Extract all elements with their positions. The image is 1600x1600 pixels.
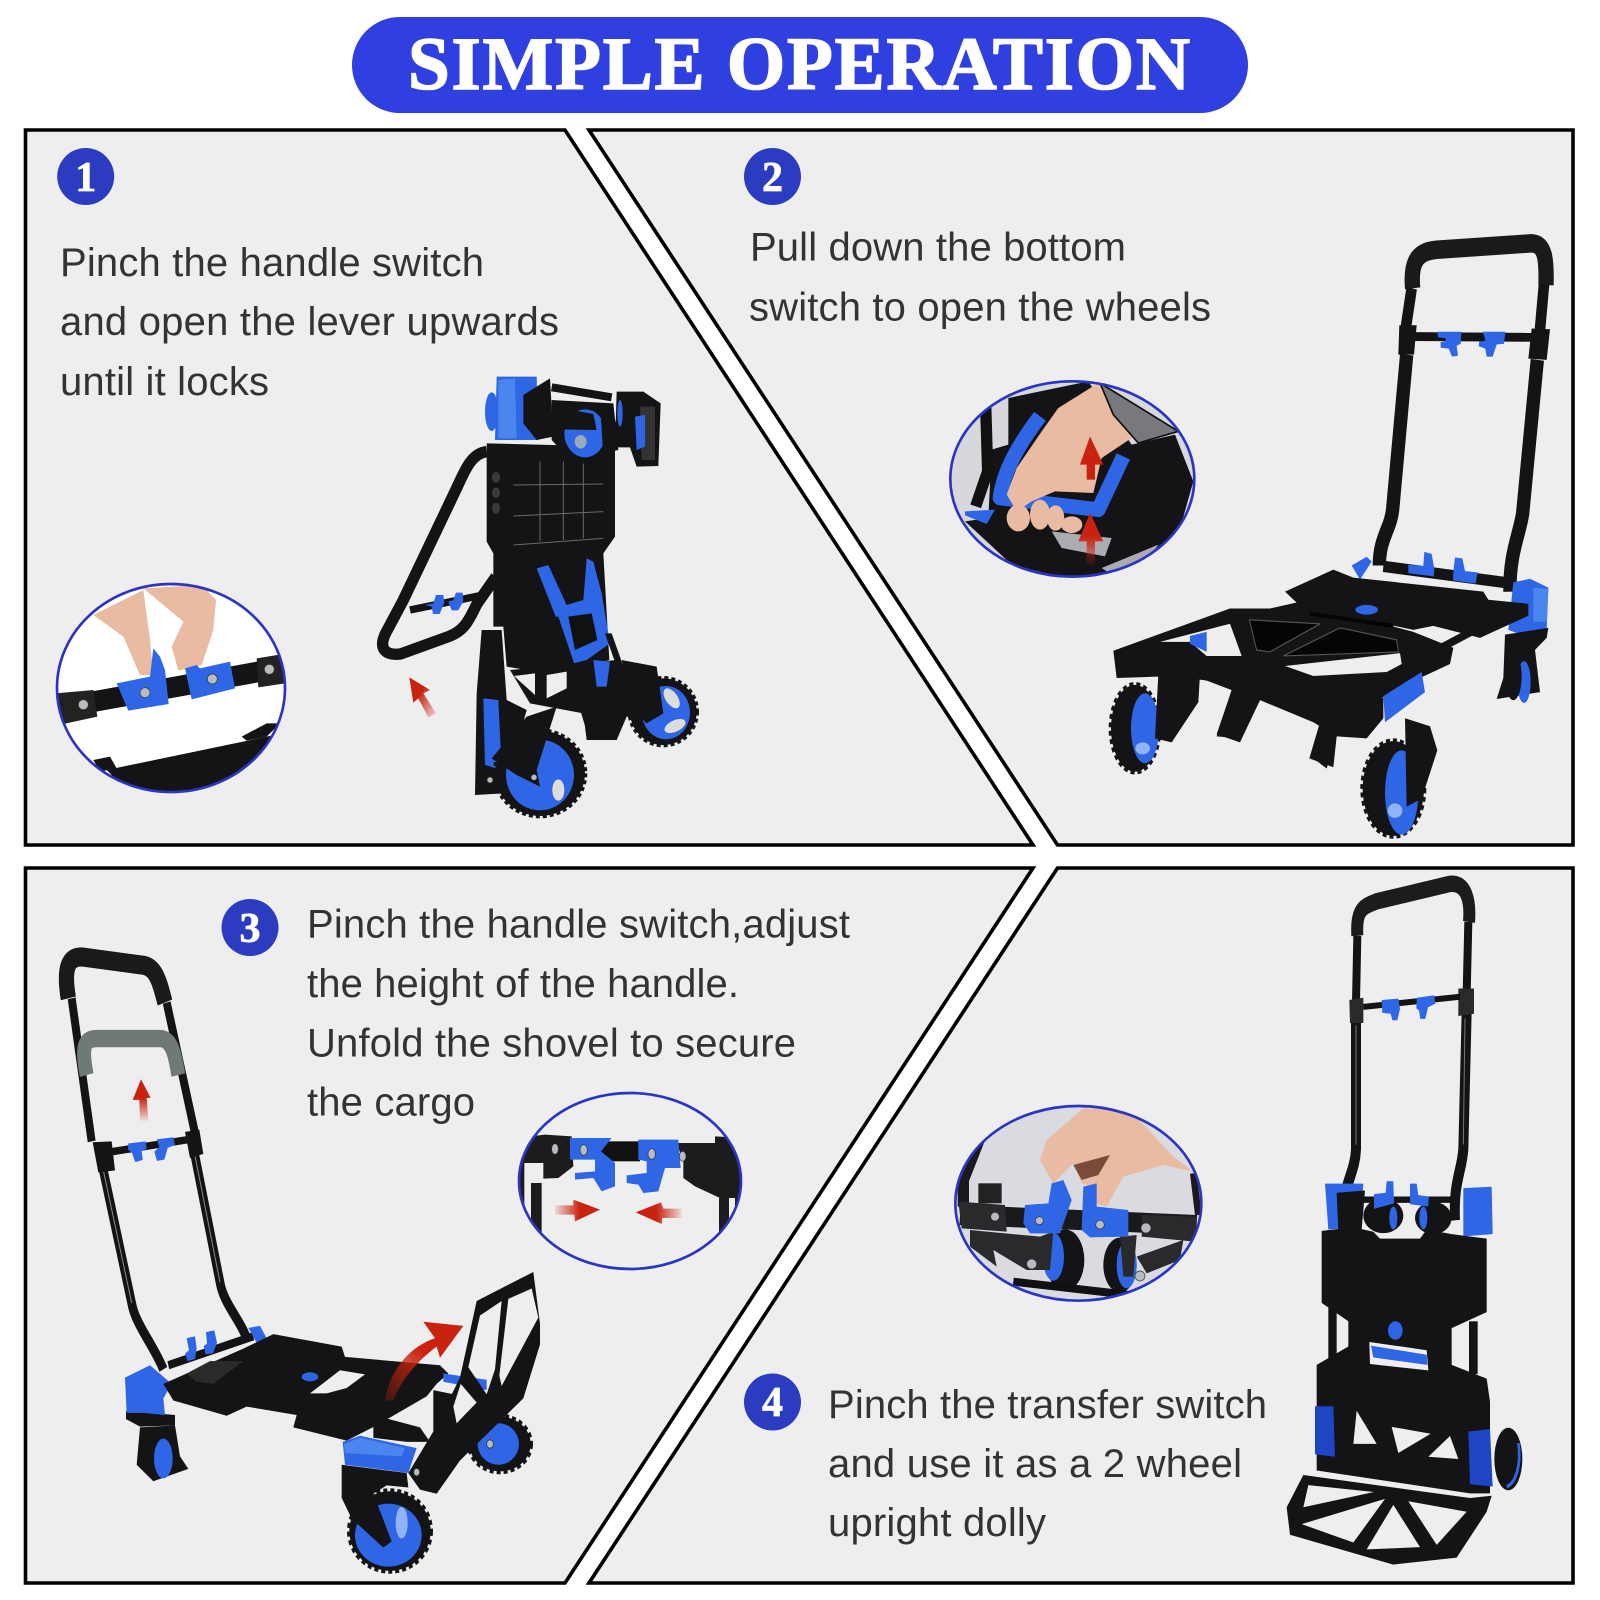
step 2 instructions: Pull down the bottom [750,226,1126,270]
step 1 folded trolley photo [383,377,697,817]
inset: pinching transfer switch [950,1100,1208,1306]
step 2 instructions: switch to open the wheels [749,286,1211,330]
step 4 instructions: Pinch the transfer switch [828,1383,1267,1427]
step 4 instructions: and use it as a 2 wheel [828,1442,1242,1486]
step 4 instructions: upright dolly [828,1501,1046,1545]
badge 4 [744,1374,801,1430]
panel: step 2 [589,130,1573,845]
badge 1: 1 [75,155,96,201]
badge 3 [222,899,278,956]
inset: pinching handle switch [50,580,290,800]
step 4 instructions [828,1383,1267,1545]
inset: handle clips with inward arrows [515,1088,745,1273]
step 1 instructions: and open the lever upwards [60,300,559,344]
step 3 instructions: Pinch the handle switch,adjust [307,902,850,946]
step 3 trolley with shovel photo [66,957,540,1572]
step 1 instructions [60,241,559,404]
badge 1 [57,148,114,205]
panel: step 1 [26,130,1033,845]
badge 2: 2 [762,155,783,201]
step 1 instructions: Pinch the handle switch [60,241,484,285]
title banner: SIMPLE OPERATION [408,23,1190,106]
badge 4: 4 [762,1380,783,1426]
badge 2 [744,148,801,205]
step 3 instructions: Unfold the shovel to secure [307,1022,796,1066]
inset: pulling bottom switch [945,378,1200,583]
step 2 instructions [749,226,1211,330]
step 4 upright dolly photo [1287,884,1522,1565]
panel: step 3 [26,868,1033,1583]
step 3 instructions: the height of the handle. [307,962,739,1006]
step 2 unfolded platform trolley photo [1110,243,1550,837]
badge 3: 3 [240,906,260,952]
step 1 instructions: until it locks [60,360,269,404]
step 3 instructions [307,902,850,1124]
panel: step 4 [589,868,1573,1583]
step 3 instructions: the cargo [307,1080,475,1124]
